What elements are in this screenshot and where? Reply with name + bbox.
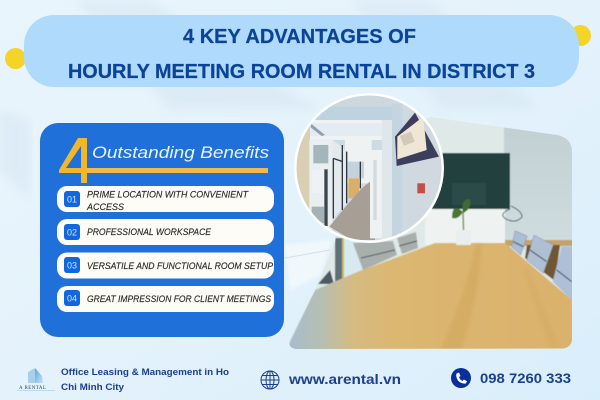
far chairs	[353, 232, 418, 270]
right chairs	[512, 231, 573, 302]
benefit row 01: 01	[67, 194, 77, 204]
footer logo: A RENTAL	[19, 386, 46, 391]
footer tagline: Chi Minh City	[61, 382, 125, 392]
benefit row 01: ACCESS	[86, 202, 125, 213]
benefit row 02	[57, 219, 274, 245]
icon: globe	[261, 371, 279, 389]
benefit row 03: 03	[67, 260, 77, 270]
benefit row 04: GREAT IMPRESSION FOR CLIENT MEETINGS	[87, 294, 272, 305]
rear bench	[505, 240, 575, 246]
panel: outstanding benefits	[40, 123, 284, 337]
footer logo	[17, 368, 55, 391]
fire alarm box	[417, 183, 425, 193]
big number 4	[59, 138, 87, 183]
photo: meeting room	[280, 110, 575, 352]
benefit row 01: PRIME LOCATION WITH CONVENIENT	[87, 190, 249, 200]
footer tagline	[61, 367, 229, 392]
conference table	[285, 243, 575, 352]
heading underline	[87, 168, 268, 173]
benefit row 04: 04	[67, 294, 77, 304]
glass partition	[333, 140, 347, 218]
heading: Outstanding Benefits	[92, 143, 270, 162]
title banner	[24, 15, 579, 87]
benefit row 01	[57, 186, 274, 213]
corridor carpet	[329, 182, 375, 240]
icon: right yellow dot	[570, 25, 591, 46]
plant in vase	[452, 199, 471, 245]
benefit row 02: PROFESSIONAL WORKSPACE	[87, 227, 212, 238]
benefit row 03: VERSATILE AND FUNCTIONAL ROOM SETUP	[87, 261, 274, 272]
icon: phone	[451, 368, 471, 388]
title line 2: HOURLY MEETING ROOM RENTAL IN DISTRICT 3	[68, 60, 535, 83]
white door	[370, 150, 382, 238]
benefit row 04	[57, 286, 274, 312]
left window strip	[343, 238, 365, 278]
footer tagline: Office Leasing & Management in Ho	[61, 367, 229, 377]
cable	[503, 206, 522, 221]
benefit row 02: 02	[67, 228, 77, 238]
icon: left yellow dot	[5, 48, 26, 69]
phone number: 098 7260 333	[480, 370, 571, 386]
benefit row 03	[57, 252, 274, 278]
wall-mounted TV	[425, 153, 510, 209]
circular inset photo: corridor	[294, 93, 444, 243]
website: www.arental.vn	[288, 371, 401, 387]
glass door left	[309, 139, 333, 229]
far corridor	[345, 140, 372, 183]
title line 1: 4 KEY ADVANTAGES OF	[183, 25, 416, 48]
wall sign	[395, 113, 439, 166]
